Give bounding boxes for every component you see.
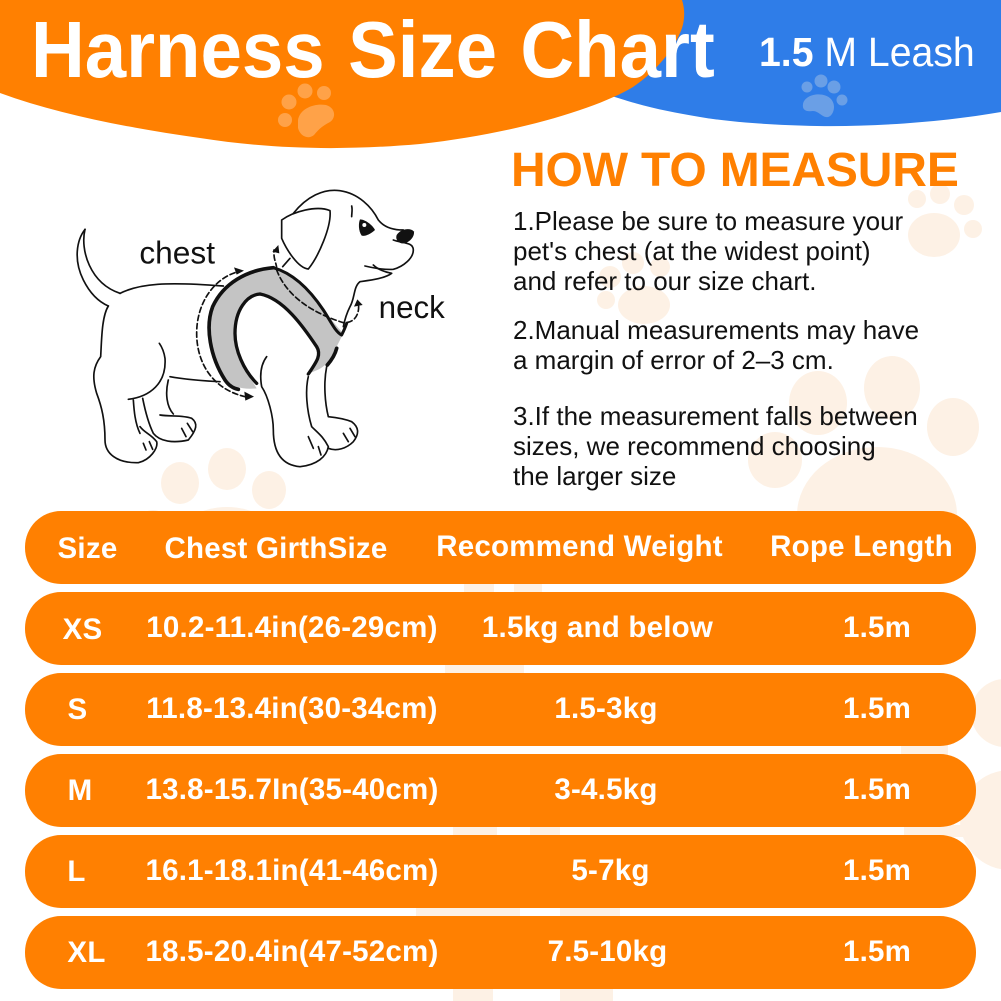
rope L: 1.5m xyxy=(843,854,911,887)
icon: blue banner paw xyxy=(802,74,848,118)
face xyxy=(359,219,375,236)
table header row xyxy=(25,511,976,584)
leash label: 1.5 M Leash xyxy=(759,29,975,75)
rope S: 1.5m xyxy=(843,692,911,725)
harness fill xyxy=(209,268,343,389)
instruction 1: 1.Please be sure to measure your xyxy=(513,206,903,236)
instruction 3: 3.If the measurement falls between xyxy=(513,401,918,431)
heading: how to measure: HOW TO MEASURE xyxy=(511,144,959,197)
instruction 1: pet's chest (at the widest point) xyxy=(513,236,871,266)
harness straps xyxy=(209,268,347,389)
size S: S xyxy=(68,693,87,726)
row: S xyxy=(25,673,976,746)
chest XL: 18.5-20.4in(47-52cm) xyxy=(145,935,439,968)
header: size: Size xyxy=(58,532,117,565)
title: Harness Size Chart xyxy=(31,4,715,94)
orange title banner xyxy=(0,0,684,148)
chest M: 13.8-15.7In(35-40cm) xyxy=(145,773,439,806)
size XL: XL xyxy=(67,936,106,969)
row: XS xyxy=(25,592,976,665)
size L: L xyxy=(67,855,86,888)
instruction 2: 2.Manual measurements may have xyxy=(513,315,919,345)
instruction 3 xyxy=(513,401,918,491)
instruction 1: and refer to our size chart. xyxy=(513,266,816,296)
chest L: 16.1-18.1in(41-46cm) xyxy=(145,854,439,887)
instruction 3: the larger size xyxy=(513,461,676,491)
header: recommend weight: Recommend Weight xyxy=(436,530,723,563)
header: chest girth: Chest GirthSize xyxy=(165,532,387,565)
size XS: XS xyxy=(63,613,102,646)
arrow heads xyxy=(234,245,363,401)
blue leash banner xyxy=(614,0,1001,126)
instruction 1 xyxy=(513,206,903,296)
diagram: dog wearing harness xyxy=(76,190,445,468)
rope XL: 1.5m xyxy=(843,935,911,968)
label: neck: neck xyxy=(379,290,445,325)
row: XL xyxy=(25,916,976,989)
weight XS: 1.5kg and below xyxy=(482,611,713,644)
weight L: 5-7kg xyxy=(571,854,650,887)
instruction 3: sizes, we recommend choosing xyxy=(513,431,876,461)
header: rope length: Rope Length xyxy=(770,530,953,563)
size M: M xyxy=(68,774,92,807)
row: L xyxy=(25,835,976,908)
dog body outline xyxy=(77,190,413,467)
rope M: 1.5m xyxy=(843,773,911,806)
rope XS: 1.5m xyxy=(843,611,911,644)
weight XL: 7.5-10kg xyxy=(548,935,667,968)
icon: orange banner paw xyxy=(278,84,334,138)
chest S: 11.8-13.4in(30-34cm) xyxy=(146,692,438,725)
chest XS: 10.2-11.4in(26-29cm) xyxy=(146,611,438,644)
measuring arrows xyxy=(197,250,359,397)
weight S: 1.5-3kg xyxy=(554,692,658,725)
weight M: 3-4.5kg xyxy=(554,773,658,806)
instruction 2 xyxy=(513,315,919,375)
instruction 2: a margin of error of 2–3 cm. xyxy=(513,345,834,375)
row: M xyxy=(25,754,976,827)
label: chest: chest xyxy=(139,235,215,271)
